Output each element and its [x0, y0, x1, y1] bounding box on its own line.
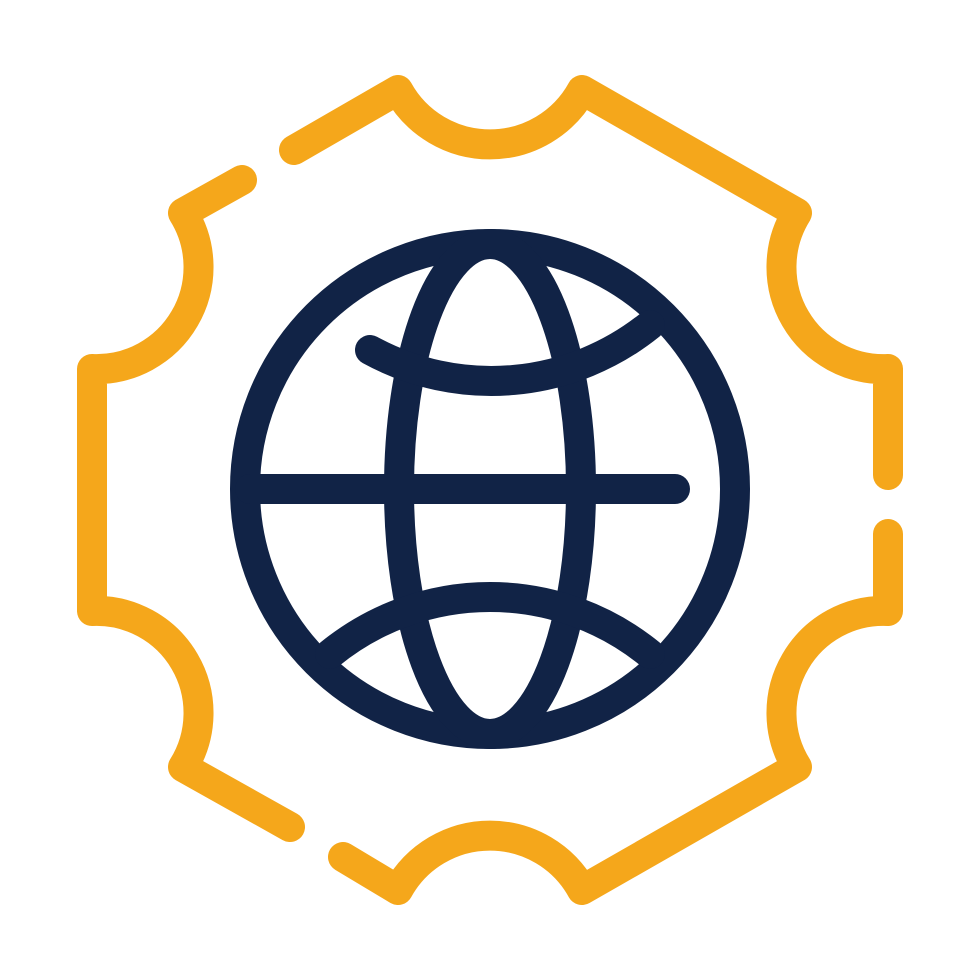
icon: gear outline: [92, 90, 888, 890]
equator line: [250, 474, 675, 504]
globe outer circle: [245, 244, 735, 734]
upper latitude arc: [370, 325, 650, 381]
icon: globe: [245, 244, 735, 734]
globe meridian ellipse: [399, 244, 581, 734]
lower latitude arc: [330, 597, 650, 654]
